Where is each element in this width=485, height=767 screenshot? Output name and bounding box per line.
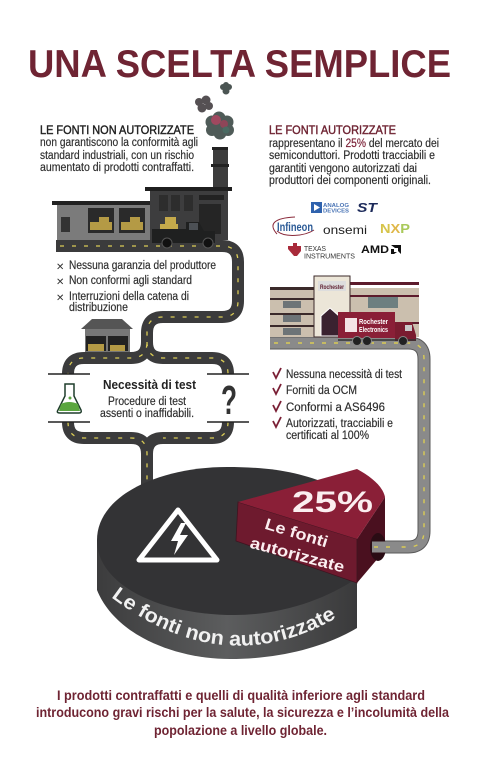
title: UNA SCELTA SEMPLICE [28, 43, 451, 86]
list: unauthorized risks: Nessuna garanzia del produttore [69, 260, 216, 272]
logos: manufacturers: ANALOG [323, 203, 349, 209]
logos: manufacturers: NXP [380, 221, 410, 236]
panel: testing needed: assenti o inaffidabili. [100, 408, 194, 420]
text block: authorized sources: produttori dei componenti originali. [269, 175, 431, 187]
list: authorized benefits: Autorizzati, tracciabili e [286, 418, 393, 430]
icon: pickup truck [152, 222, 215, 248]
footer statement [36, 687, 449, 738]
text block: authorized sources: LE FONTI AUTORIZZATE [269, 125, 396, 137]
pie slice: authorized sources 25%: autorizzate [248, 535, 346, 576]
panel: testing needed: Procedure di test [108, 396, 187, 408]
list: unauthorized risks [56, 260, 216, 314]
chart: 3D pie [97, 467, 394, 659]
pie slice: unauthorized sources [97, 467, 357, 659]
road: unauthorized route [56, 246, 238, 492]
list: unauthorized risks: ✕ [56, 277, 64, 288]
text block: authorized sources: semiconduttori. Prodotti tracciabili e [269, 150, 435, 162]
logos: manufacturers: TEXAS [304, 244, 326, 253]
list: unauthorized risks: ✕ [56, 293, 64, 304]
logos: manufacturers: Infineon [277, 220, 313, 234]
text block: authorized sources: garantiti vengono autorizzati dai [269, 163, 417, 175]
pie slice: authorized sources 25%: Le fonti [263, 516, 330, 551]
list: authorized benefits: Nessuna necessità di test [286, 369, 403, 381]
icon: Rochester building [270, 276, 419, 337]
pie slice: authorized sources 25%: 25% [292, 486, 373, 519]
icon: smoke clouds [195, 82, 234, 140]
logos: manufacturers [273, 200, 410, 260]
logos: manufacturers: AMD [361, 244, 389, 256]
icon: question mark: ? [221, 377, 237, 423]
pie slice: unauthorized sources: Le fonti non autorizzate [112, 586, 334, 646]
footer statement: I prodotti contraffatti e quelli di qualità inferiore agli standard [57, 687, 425, 703]
logos: manufacturers: onsemi [323, 223, 367, 237]
text block: authorized sources [269, 125, 439, 187]
icon: flask [57, 384, 81, 413]
footer statement: popolazione a livello globale. [154, 722, 327, 738]
list: authorized benefits: certificati al 100% [286, 430, 369, 442]
text block: unauthorized sources [40, 125, 198, 174]
list: unauthorized risks: Interruzioni della catena di [69, 291, 189, 303]
list: unauthorized risks: Non conformi agli standard [69, 275, 192, 287]
panel: testing needed: Necessità di test [103, 377, 197, 392]
icon: Rochester truck: Rochester [359, 317, 388, 326]
list: unauthorized risks: distribuzione [69, 302, 128, 314]
icon: factory [52, 147, 232, 240]
icon: warehouse [81, 319, 133, 352]
list: unauthorized risks: ✕ [56, 262, 64, 273]
list: authorized benefits: Forniti da OCM [286, 385, 357, 397]
icon: Rochester truck: Electronics [359, 325, 388, 334]
text block: authorized sources: rappresentano il 25% del mercato dei [269, 138, 439, 150]
icon: high-voltage warning [139, 510, 217, 560]
logos: manufacturers: INSTRUMENTS [304, 252, 355, 260]
footer statement: introducono gravi rischi per la salute, la sicurezza e l’incolumità della [36, 704, 449, 720]
list: authorized benefits: Conformi a AS6496 [286, 402, 385, 414]
text block: unauthorized sources: LE FONTI NON AUTORIZZATE [40, 125, 194, 137]
logos: manufacturers: DEVICES [323, 208, 349, 214]
icon: Rochester building: Rochester [320, 285, 345, 291]
text block: unauthorized sources: standard industriali, con un rischio [40, 150, 194, 162]
logos: manufacturers: ST [357, 200, 378, 215]
panel: testing needed [48, 374, 249, 422]
text block: unauthorized sources: aumentato di prodotti contraffatti. [40, 162, 194, 174]
list: authorized benefits [273, 368, 403, 442]
icon: Rochester truck [338, 312, 416, 346]
pie slice: authorized sources 25% [236, 469, 398, 583]
road: authorized route [270, 343, 424, 547]
text block: unauthorized sources: non garantiscono la conformità agli [40, 137, 198, 149]
